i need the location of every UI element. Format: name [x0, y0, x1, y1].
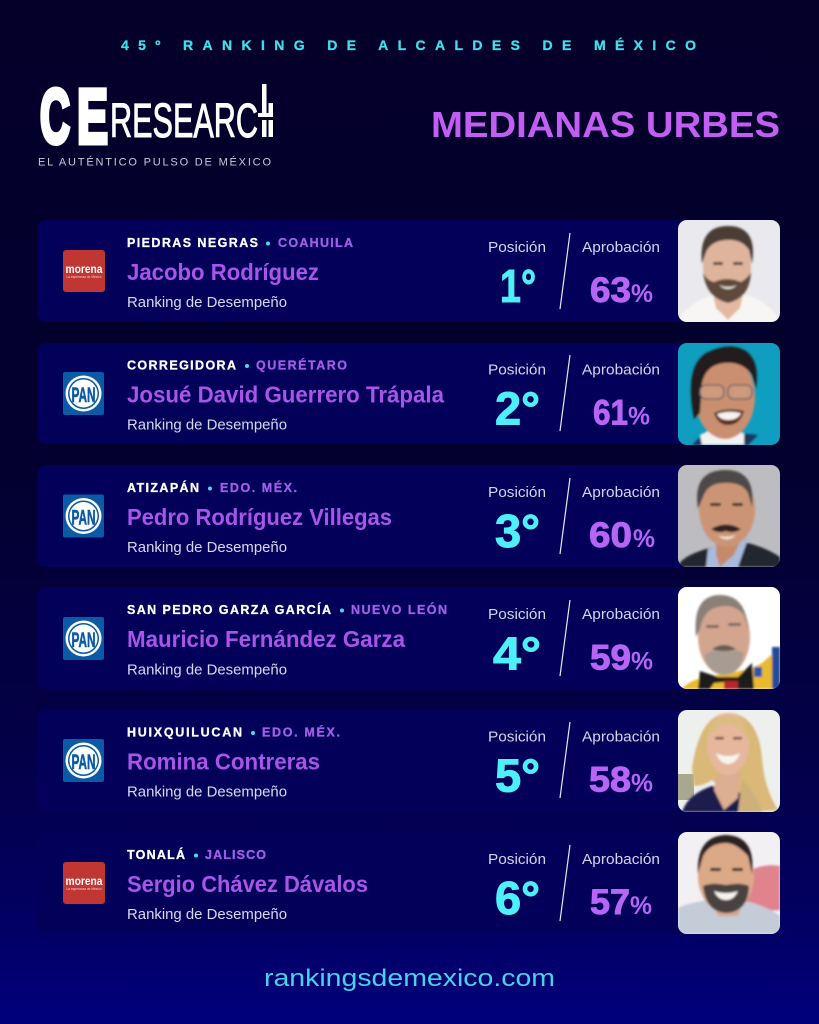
location [127, 236, 353, 250]
name: Romina Contreras [127, 748, 320, 774]
approval value: % [631, 648, 653, 676]
logo tagline: EL AUTÉNTICO PULSO DE MÉXICO [38, 156, 271, 168]
approval value: % [628, 402, 650, 430]
approval value [593, 394, 650, 432]
row 1 [37, 220, 780, 322]
location: CORREGIDORA [127, 358, 236, 372]
party logo: PAN [63, 617, 104, 660]
approval value: % [630, 892, 652, 920]
party logo: morena: morena [66, 874, 103, 888]
approval label: Aprobación [582, 239, 660, 256]
photo: Mauricio Fernández Garza [678, 587, 780, 689]
photo: Jacobo Rodríguez [678, 220, 780, 322]
logo: CE Research [40, 74, 273, 160]
approval value [589, 760, 653, 800]
position label: Posición [488, 606, 546, 623]
location: EDO. MÉX. [220, 480, 297, 495]
subtitle: Ranking de Desempeño [127, 416, 287, 434]
approval value: 58 [589, 760, 631, 800]
location: TONALÁ [127, 847, 185, 862]
approval value [590, 883, 652, 922]
subtitle: Ranking de Desempeño [127, 539, 287, 556]
party logo: morena: La esperanza de México [66, 886, 102, 891]
row 2 [37, 343, 780, 445]
approval value [590, 638, 653, 678]
location: PIEDRAS NEGRAS [127, 236, 258, 250]
photo: Josué David Guerrero Trápala [678, 343, 780, 445]
position value: 3° [495, 505, 540, 557]
category heading: MEDIANAS URBES [431, 104, 780, 145]
approval value [589, 516, 655, 555]
row 4 [37, 587, 780, 689]
top heading: 45º RANKING DE ALCALDES DE MÉXICO [121, 37, 696, 53]
photo: Romina Contreras [678, 710, 780, 812]
location: COAHUILA [278, 236, 353, 250]
footer website: rankingsdemexico.com [264, 965, 555, 992]
photo: Sergio Chávez Dávalos [678, 832, 780, 934]
approval value: % [631, 280, 653, 308]
name: Sergio Chávez Dávalos [127, 871, 368, 897]
approval value: % [633, 525, 655, 553]
party logo: PAN: PAN [72, 384, 96, 407]
name: Josué David Guerrero Trápala [127, 382, 444, 408]
approval label: Aprobación [582, 362, 660, 378]
party logo: morena [63, 862, 105, 904]
position value: 4° [493, 628, 541, 680]
approval value [590, 271, 653, 310]
logo: CE Research: C [40, 74, 70, 160]
position label: Posición [488, 362, 546, 378]
row 6 [37, 832, 780, 934]
party logo: morena: La esperanza de México [66, 274, 102, 279]
position label: Posición [488, 851, 546, 868]
approval label: Aprobación [582, 728, 660, 746]
name: Mauricio Fernández Garza [127, 626, 405, 652]
row 3 [37, 465, 780, 567]
name: Pedro Rodríguez Villegas [127, 504, 392, 530]
subtitle: Ranking de Desempeño [127, 662, 287, 678]
party logo: PAN: PAN [72, 751, 96, 774]
approval label: Aprobación [582, 606, 660, 623]
party logo: PAN [63, 372, 104, 415]
position label: Posición [488, 239, 546, 256]
approval label: Aprobación [582, 484, 660, 501]
location: ATIZAPÁN [127, 480, 199, 495]
party logo: morena: morena [66, 262, 103, 276]
approval value: 59 [590, 638, 631, 678]
location [127, 358, 347, 372]
location [127, 480, 297, 495]
photo: Pedro Rodríguez Villegas [678, 465, 780, 567]
logo: CE Research: RESEARC [110, 95, 258, 148]
location: NUEVO LEÓN [351, 602, 447, 617]
approval value: 60 [589, 516, 632, 555]
location: QUERÉTARO [256, 358, 347, 372]
party logo: PAN: PAN [72, 629, 96, 652]
party logo: morena [63, 250, 105, 292]
subtitle: Ranking de Desempeño [127, 294, 287, 311]
position label: Posición [488, 484, 546, 501]
subtitle: Ranking de Desempeño [127, 906, 287, 923]
position value: 1° [500, 260, 536, 312]
approval value: 57 [590, 883, 630, 922]
location: SAN PEDRO GARZA GARCÍA [127, 602, 331, 617]
approval value: % [631, 770, 653, 798]
location: JALISCO [205, 848, 266, 862]
position value: 6° [495, 872, 540, 924]
subtitle: Ranking de Desempeño [127, 784, 287, 800]
position value: 5° [495, 750, 540, 802]
location [127, 847, 266, 862]
party logo: PAN [63, 494, 104, 538]
location [127, 602, 447, 617]
location: HUIXQUILUCAN [127, 726, 242, 740]
location: EDO. MÉX. [262, 724, 340, 740]
party logo: PAN [63, 739, 104, 782]
party logo: PAN: PAN [72, 506, 96, 530]
row 5 [37, 710, 780, 812]
position value: 2° [495, 382, 540, 434]
location [127, 724, 340, 740]
approval value: 61 [593, 394, 628, 432]
logo: CE Research: E [77, 74, 108, 160]
name: Jacobo Rodríguez [127, 259, 319, 285]
approval value: 63 [590, 271, 631, 310]
approval label: Aprobación [582, 851, 660, 868]
position label: Posición [488, 728, 546, 746]
